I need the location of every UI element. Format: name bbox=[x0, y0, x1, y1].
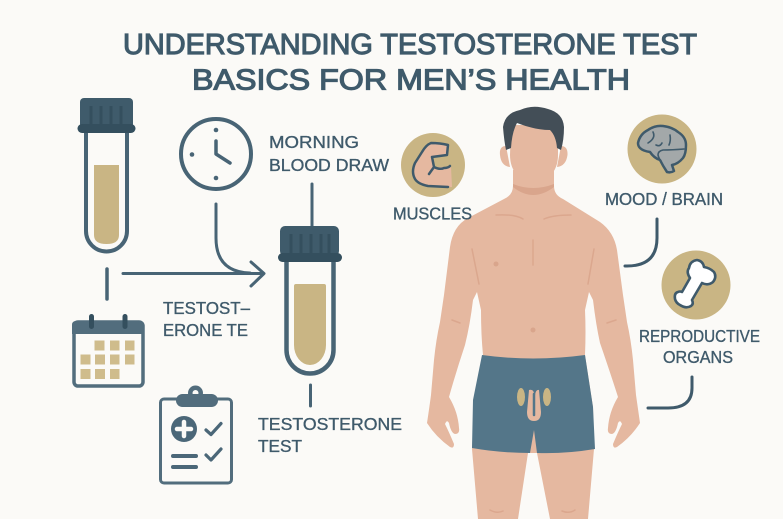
figure: male body bbox=[427, 107, 640, 519]
connector: label to tube top bbox=[310, 184, 314, 228]
label: mood / brain: MOOD / BRAIN bbox=[605, 189, 723, 209]
connector: tube to label below bbox=[309, 385, 312, 406]
label: reproductive organs bbox=[639, 326, 760, 367]
label: morning blood draw: BLOOD DRAW bbox=[269, 155, 389, 175]
icon: brain bbox=[628, 114, 696, 184]
face bbox=[510, 125, 558, 186]
ears bbox=[500, 146, 568, 167]
title: UNDERSTANDING TESTOSTERONE TEST bbox=[123, 29, 697, 61]
chest lines bbox=[452, 215, 616, 512]
neck shadow bbox=[513, 184, 554, 195]
label: morning blood draw bbox=[269, 132, 389, 175]
icon: clipboard bbox=[160, 386, 232, 483]
label: testosterone test: TEST bbox=[258, 436, 302, 456]
icon: calendar bbox=[72, 314, 144, 386]
label: testost-erone te bbox=[163, 298, 250, 340]
connector: brain to body bbox=[625, 219, 657, 266]
label: testosterone test bbox=[258, 414, 402, 456]
nipple bbox=[494, 262, 498, 266]
icon: muscle bbox=[401, 133, 465, 197]
label: testost-erone te: ERONE TE bbox=[163, 320, 248, 340]
label: testosterone test: TESTOSTERONE bbox=[258, 414, 402, 434]
icon: test tube center bbox=[278, 226, 342, 374]
icon: clock bbox=[181, 119, 251, 189]
icon: test tube left bbox=[78, 98, 136, 252]
navel bbox=[530, 328, 536, 332]
hair bbox=[503, 107, 564, 150]
label: testost-erone te: TESTOST– bbox=[163, 298, 250, 318]
connector: tube to calendar bbox=[105, 269, 109, 299]
label: reproductive organs: ORGANS bbox=[663, 347, 733, 367]
body silhouette bbox=[427, 170, 640, 519]
arrow: clock to tube bbox=[216, 204, 250, 273]
label: reproductive organs: REPRODUCTIVE bbox=[639, 326, 760, 346]
label: morning blood draw: MORNING bbox=[269, 132, 359, 152]
title bbox=[123, 29, 697, 96]
arrow: calendar to tube bbox=[123, 262, 264, 286]
shorts bbox=[472, 355, 595, 453]
icon: bone bbox=[662, 250, 730, 320]
title: BASICS FOR MEN’S HEALTH bbox=[192, 64, 630, 96]
reproductive organ diagram bbox=[517, 388, 551, 421]
label: muscles: MUSCLES bbox=[393, 204, 472, 224]
connector: reproductive label to body bbox=[648, 377, 692, 408]
